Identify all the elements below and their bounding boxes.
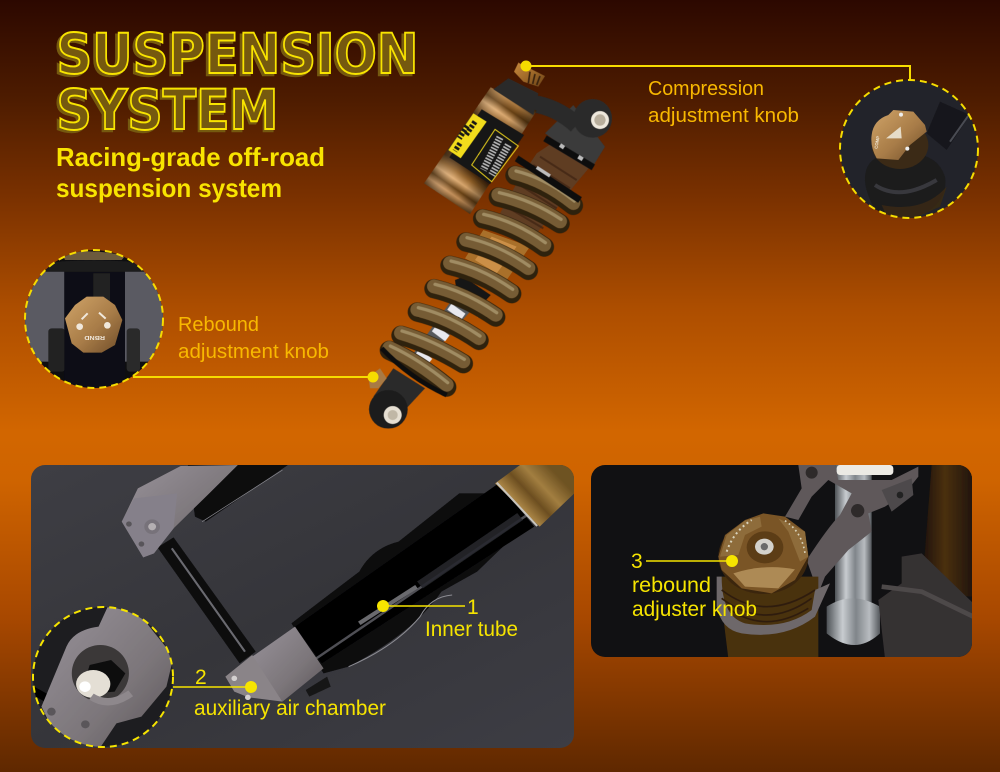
coil spring bbox=[389, 171, 574, 387]
black cross rod bbox=[157, 537, 256, 663]
callout 3: rebound adjuster knob: 3 bbox=[631, 550, 643, 573]
label: rebound adjustment knob: Rebound bbox=[178, 314, 259, 336]
subtitle: suspension system bbox=[56, 173, 282, 203]
air chamber inset image bbox=[32, 603, 174, 750]
callout 3: rebound adjuster knob: rebound bbox=[632, 574, 711, 597]
subtitle: Racing-grade off-road bbox=[56, 142, 325, 172]
title shadow: SUSPENSION SYSTEM: SYSTEM bbox=[54, 80, 277, 144]
inset: compression knob detail bbox=[838, 78, 980, 223]
shock absorber product image bbox=[368, 63, 612, 429]
title shadow: SUSPENSION SYSTEM: SUSPENSION bbox=[54, 24, 416, 88]
panel: inner tube and auxiliary air chamber bbox=[31, 465, 574, 750]
label: rebound adjustment knob bbox=[178, 314, 329, 363]
label: compression adjustment knob bbox=[648, 78, 799, 127]
upper gray clamp bbox=[122, 465, 238, 557]
rebound knob top bbox=[718, 513, 808, 594]
connector: rebound knob bbox=[133, 372, 378, 382]
callout 2: auxiliary air chamber: auxiliary air chamber bbox=[194, 697, 386, 720]
right fork leg bbox=[922, 465, 973, 597]
lower gray yoke bbox=[878, 553, 973, 658]
title outline: SUSPENSION SYSTEM: SUSPENSION bbox=[56, 22, 418, 86]
wavy fork guard bbox=[291, 493, 527, 673]
label: rebound adjustment knob: adjustment knob bbox=[178, 341, 329, 363]
reservoir outlined spec box bbox=[472, 129, 518, 182]
label: compression adjustment knob: adjustment knob bbox=[648, 105, 799, 127]
title shadow: SUSPENSION SYSTEM bbox=[54, 24, 416, 144]
left fork body with threads bbox=[717, 577, 830, 658]
title outline: SUSPENSION SYSTEM: SYSTEM bbox=[56, 78, 278, 142]
callout 3: rebound adjuster knob bbox=[631, 550, 757, 621]
label: compression adjustment knob: Compression bbox=[648, 78, 764, 100]
connector: compression knob bbox=[520, 60, 910, 80]
title outline: SUSPENSION SYSTEM bbox=[56, 22, 418, 142]
inset: rebound knob detail: RBND bbox=[84, 334, 105, 340]
title bbox=[54, 22, 418, 144]
compression knob on shock bbox=[514, 63, 545, 87]
silver stanchion bbox=[827, 465, 893, 645]
inset: compression knob detail: COMP bbox=[873, 135, 881, 149]
subtitle bbox=[56, 142, 325, 203]
upper fork leg stub bbox=[188, 465, 288, 522]
gold fork crown bbox=[495, 465, 574, 527]
spring collar and head bbox=[517, 99, 612, 200]
callout 1: inner tube: 1 bbox=[467, 596, 479, 619]
lower eyelet mount bbox=[369, 348, 447, 429]
gray top bracket bbox=[785, 465, 918, 593]
callout 1: inner tube: Inner tube bbox=[425, 618, 518, 641]
inset: rebound knob detail bbox=[23, 248, 165, 390]
callout 1: inner tube bbox=[377, 596, 518, 641]
callout 3: rebound adjuster knob: adjuster knob bbox=[632, 598, 757, 621]
inner tube black cylinder bbox=[295, 483, 534, 663]
panel: rebound adjuster knob bbox=[591, 465, 973, 658]
callout 2: auxiliary air chamber: 2 bbox=[195, 666, 207, 689]
rebound knob on shock bbox=[368, 368, 387, 388]
reservoir yellow label bbox=[448, 113, 487, 158]
lower gray clamp bbox=[225, 627, 331, 702]
reservoir canister bbox=[424, 78, 538, 214]
callout 2: auxiliary air chamber bbox=[173, 666, 386, 720]
air chamber inset border bbox=[33, 607, 173, 747]
shock core: thread, gold sleeve, rod bbox=[410, 143, 590, 367]
